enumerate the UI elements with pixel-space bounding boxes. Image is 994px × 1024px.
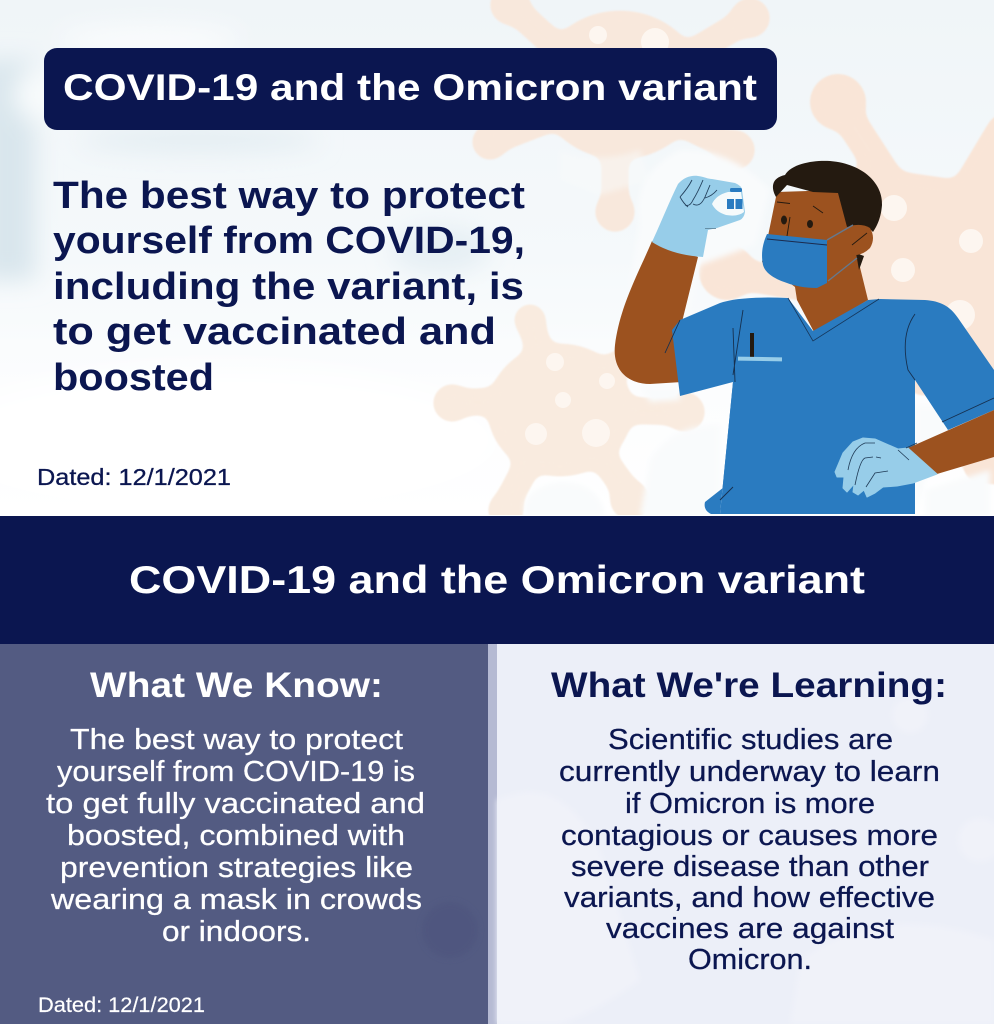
headline message: The best way to protect xyxy=(53,175,525,217)
panel: what we're learning xyxy=(497,644,994,1024)
body text: if Omicron is more xyxy=(625,788,875,820)
panel: what we know xyxy=(0,644,488,1024)
neck and face xyxy=(762,190,868,332)
body text: vaccines are against xyxy=(606,913,894,945)
virus: top xyxy=(472,0,770,232)
hero background xyxy=(0,0,994,528)
virus dots xyxy=(525,26,983,447)
white highlights xyxy=(598,151,992,515)
scrub lines xyxy=(665,310,994,500)
panel divider xyxy=(488,644,497,1024)
raised glove xyxy=(652,176,745,257)
body text: contagious or causes more xyxy=(561,820,938,852)
body text: yourself from COVID-19 is xyxy=(57,756,415,788)
body text: or indoors. xyxy=(162,916,311,948)
scrubs xyxy=(705,382,733,514)
title text: COVID-19 and the Omicron variant xyxy=(63,67,757,108)
date: Dated: 12/1/2021 xyxy=(38,994,205,1017)
body text: The best way to protect xyxy=(70,724,403,756)
headline message: yourself from COVID-19, xyxy=(53,220,525,262)
body text: boosted, combined with xyxy=(67,820,405,852)
body text: to get fully vaccinated and xyxy=(46,788,425,820)
body text: variants, and how effective xyxy=(564,882,935,914)
heading: What We're Learning: xyxy=(551,666,947,705)
pen and pocket xyxy=(750,333,754,357)
face mask xyxy=(762,234,827,288)
illustration: nurse holding vial xyxy=(615,161,994,514)
ear xyxy=(852,224,873,255)
date: hero: Dated: 12/1/2021 xyxy=(37,464,231,490)
heading: What We Know: xyxy=(90,666,383,705)
body text: prevention strategies like xyxy=(60,852,413,884)
banner title: COVID-19 and the Omicron variant xyxy=(129,559,865,602)
headline message: including the variant, is xyxy=(53,266,524,308)
virus: right xyxy=(699,74,994,485)
eyes and brows xyxy=(777,202,867,245)
hair xyxy=(773,161,882,232)
headline message: to get vaccinated and xyxy=(53,311,496,353)
body text: currently underway to learn xyxy=(559,756,940,788)
top title bar xyxy=(44,48,777,130)
lower forearm xyxy=(908,410,994,474)
virus: lower xyxy=(433,304,705,528)
headline message xyxy=(53,175,525,399)
glove fingers xyxy=(680,180,717,207)
body text: severe disease than other xyxy=(571,851,930,883)
collar xyxy=(788,298,879,341)
headline message: boosted xyxy=(53,357,214,399)
body text: Omicron. xyxy=(688,944,812,976)
lower glove xyxy=(835,438,937,497)
body text xyxy=(559,724,940,976)
raised arm xyxy=(615,241,698,384)
body text: wearing a mask in crowds xyxy=(50,884,422,916)
section banner xyxy=(0,516,994,644)
body text: Scientific studies are xyxy=(608,724,893,756)
vial xyxy=(712,188,744,216)
body text xyxy=(46,724,425,948)
